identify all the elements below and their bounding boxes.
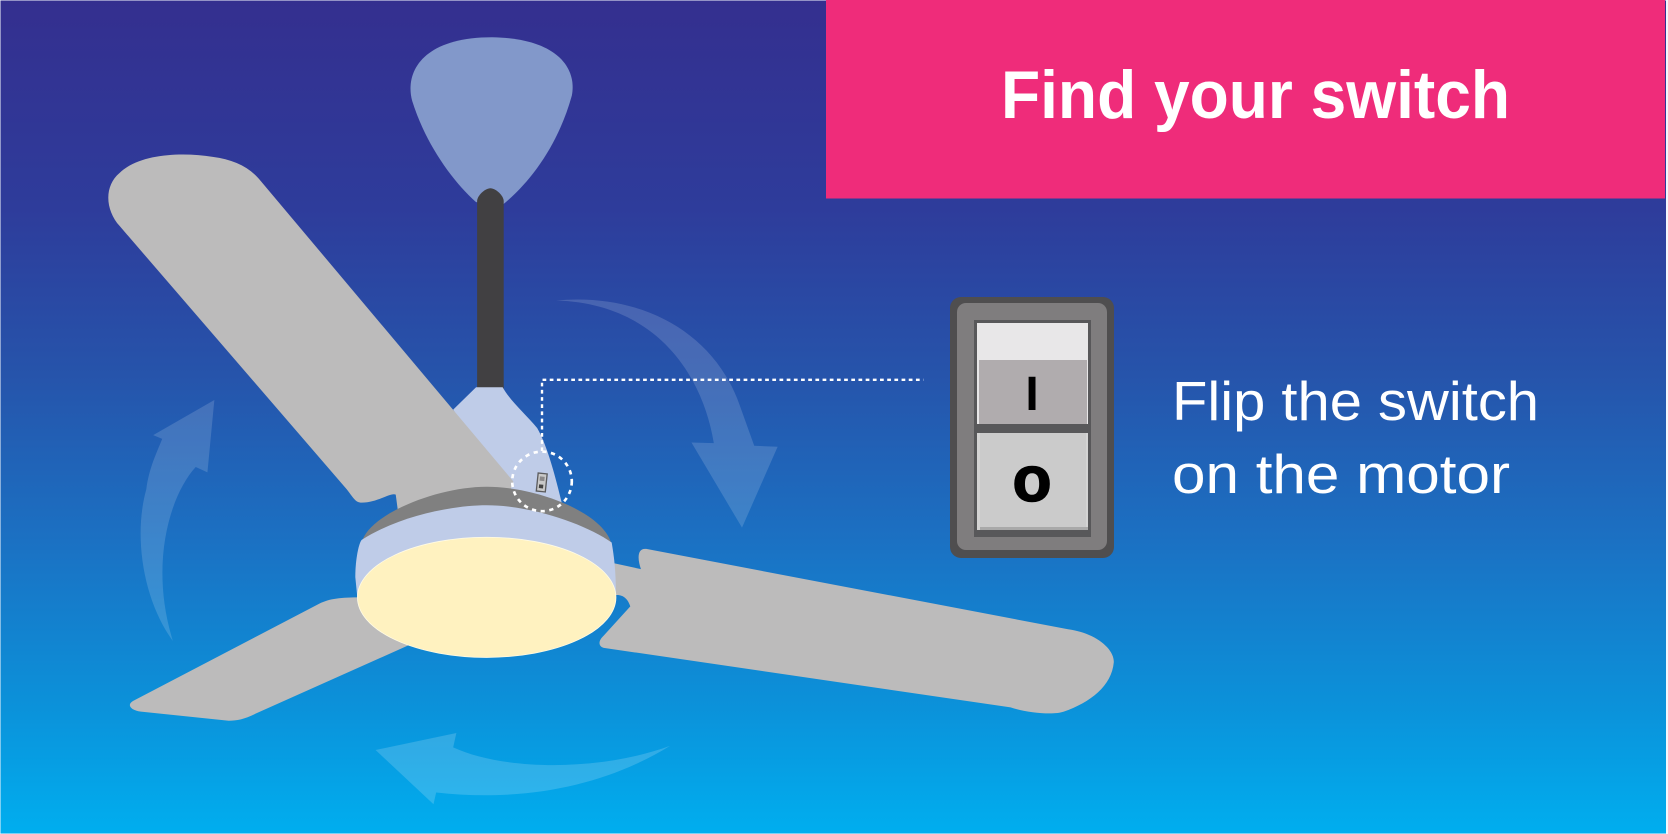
switch faceplate [957,303,1107,550]
switch label O: o [1012,443,1052,515]
dotted callout circle [512,452,572,511]
rocker on side [977,360,1088,424]
down rod [477,188,504,391]
motor ring: dark band [362,487,612,553]
illustration: ceiling fan [108,37,1114,804]
title banner [826,0,1665,198]
instruction text: on the motor [1172,443,1510,505]
dotted callout line [542,380,923,451]
motor ring: light band [355,505,616,638]
ceiling canopy [411,37,573,205]
rocker off side [977,433,1088,530]
instruction text [1172,370,1539,505]
motor housing [453,387,562,503]
rotation arrow: right [556,299,778,528]
switch label I: I [1025,368,1039,421]
instruction text: Flip the switch [1172,370,1539,432]
switch outer casing [950,297,1114,558]
large rocker switch [950,297,1114,558]
blade: upper left [108,154,513,511]
switch window [974,320,1091,537]
rotation arrow: bottom [376,733,670,804]
title text: Find your switch [1001,57,1510,133]
mini switch on motor [536,473,547,492]
light cover [357,537,616,657]
blade: right [600,549,1114,713]
rotation arrow: left [141,400,214,641]
blade: lower left [130,597,412,721]
rocker top highlight [977,323,1088,361]
